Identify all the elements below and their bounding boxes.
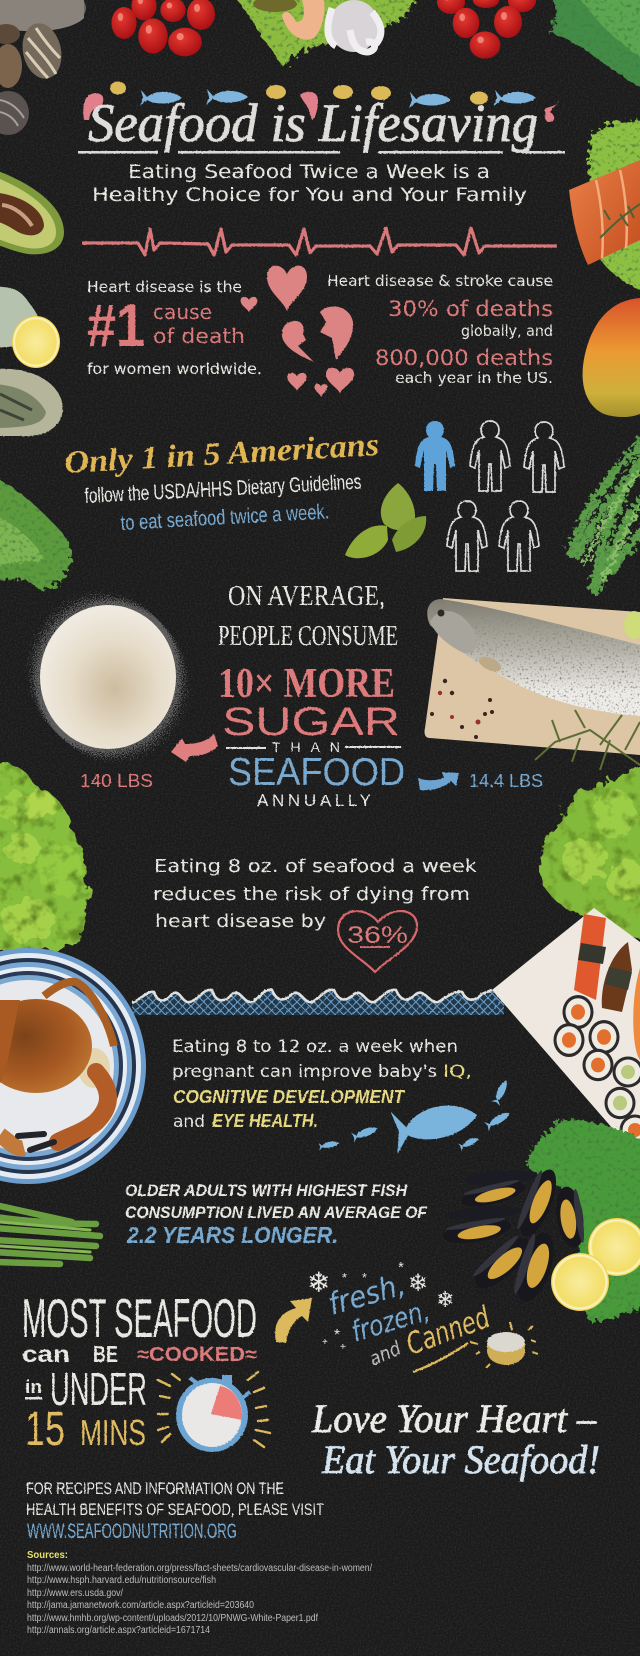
text: fresh frozen and canned with snowflakes xyxy=(307,1259,495,1372)
stat: 1 in 5 Americans: Only 1 in 5 Americans xyxy=(63,426,380,480)
stat: heart disease and stroke: 800,000 deaths xyxy=(375,346,553,370)
stat: 10x more sugar than seafood: SUGAR xyxy=(222,700,400,744)
food: mussels and lemons xyxy=(442,1165,640,1311)
food: kale right xyxy=(526,1120,640,1322)
arrow and label: sugar pounds: 140 LBS xyxy=(80,771,153,791)
stat: cook under 15 minutes: 15 xyxy=(25,1403,65,1456)
stat: 1 in 5 Americans: follow the USDA/HHS Dietary Guidelines xyxy=(84,471,362,508)
text: fresh frozen and canned with snowflakes: + xyxy=(340,1342,346,1353)
sources: Sources: xyxy=(27,1549,68,1561)
stat: pregnant baby's IQ: COGNITIVE DEVELOPMENT xyxy=(173,1087,406,1107)
stat: heart disease and stroke: each year in the US. xyxy=(395,369,553,387)
arrow and label: seafood pounds xyxy=(418,771,543,791)
sources xyxy=(27,1549,372,1636)
icon: school of fish xyxy=(318,1078,512,1154)
icon: tin can xyxy=(470,1322,538,1368)
food: trout on cutting board xyxy=(425,598,640,770)
stat: 8 oz of seafood reduces risk: Eating 8 oz. of seafood a week xyxy=(154,856,478,877)
stat: pregnant baby's IQ: pregnant can improve baby's xyxy=(172,1062,437,1082)
stat: pregnant baby's IQ: Eating 8 to 12 oz. a week when xyxy=(172,1037,458,1057)
text: fresh frozen and canned with snowflakes: ❄ xyxy=(307,1267,330,1298)
sources: http://www.hsph.harvard.edu/nutritionsource/fish xyxy=(27,1575,216,1586)
sources: http://www.hmhb.org/wp-content/uploads/2012/10/PNWG-White-Paper1.pdf xyxy=(27,1613,318,1624)
text: fresh frozen and canned with snowflakes: Canned xyxy=(402,1300,495,1363)
stat: 10x more sugar than seafood: SEAFOOD xyxy=(228,751,405,794)
stat: cook under 15 minutes: can xyxy=(22,1341,70,1367)
icon: heart with 36 percent xyxy=(338,911,417,972)
food: lettuce left xyxy=(0,764,87,952)
stat: pregnant baby's IQ: EYE HEALTH. xyxy=(212,1111,318,1131)
call to action: WWW.SEAFOODNUTRITION.ORG xyxy=(27,1520,237,1543)
food: lettuce, shrimp and octopus xyxy=(229,0,418,68)
stat: 10x more sugar than seafood: 10× MORE xyxy=(218,661,395,707)
stat: older adults live longer: CONSUMPTION LIVED AN AVERAGE OF xyxy=(125,1203,428,1222)
stat: number one cause of death xyxy=(87,278,262,378)
food: rosemary right xyxy=(570,436,640,590)
stat: heart disease and stroke: globally, and xyxy=(461,322,553,340)
icon: stopwatch xyxy=(158,1372,270,1452)
food: avocado xyxy=(0,168,64,254)
food: herbs top right xyxy=(548,0,640,100)
stat: 1 in 5 Americans xyxy=(63,426,380,535)
food: green beans xyxy=(0,1205,100,1264)
closing tagline: Eat Your Seafood! xyxy=(321,1437,600,1482)
stat: 8 oz of seafood reduces risk: heart disease by xyxy=(155,911,326,932)
icon: five people, one highlighted xyxy=(415,421,564,571)
subtitle: Healthy Choice for You and Your Family xyxy=(92,184,527,206)
waves divider xyxy=(132,990,504,1015)
icon: heart with 36 percent: 36% xyxy=(347,922,408,949)
stat: number one cause of death: Heart disease is the xyxy=(87,278,242,296)
stat: pregnant baby's IQ xyxy=(172,1037,472,1132)
stat: heart disease and stroke: Heart disease & stroke cause xyxy=(327,272,553,290)
text: fresh frozen and canned with snowflakes: ❄ xyxy=(408,1270,428,1297)
text: fresh frozen and canned with snowflakes: * xyxy=(334,1327,340,1344)
text: fresh frozen and canned with snowflakes: fresh, xyxy=(325,1268,409,1323)
arrow and label: sugar pounds xyxy=(80,734,218,791)
stat: 10x more sugar than seafood: ON AVERAGE, xyxy=(228,581,385,612)
stat: number one cause of death: #1 xyxy=(87,292,145,359)
food: basil xyxy=(345,483,426,558)
food: clams top left xyxy=(0,0,86,135)
call to action: HEALTH BENEFITS OF SEAFOOD, PLEASE VISIT xyxy=(26,1500,324,1519)
stat: cook under 15 minutes: BE xyxy=(93,1341,118,1367)
food: lettuce right xyxy=(540,764,640,950)
stat: cook under 15 minutes: in xyxy=(25,1377,42,1397)
title decorations: shrimps, dots, fish xyxy=(83,82,560,122)
stat: cook under 15 minutes xyxy=(22,1287,257,1456)
stat: cook under 15 minutes: ≈COOKED≈ xyxy=(137,1344,257,1366)
stat: number one cause of death: cause xyxy=(153,300,212,324)
stat: number one cause of death: for women worldwide. xyxy=(87,360,262,378)
sources: http://www.world-heart-federation.org/press/fact-sheets/cardiovascular-disease-in-women/ xyxy=(27,1563,372,1574)
text: fresh frozen and canned with snowflakes: frozen, xyxy=(347,1294,434,1349)
food: sugar pile xyxy=(34,599,182,755)
food: crab on striped plate xyxy=(0,948,146,1184)
closing tagline: Love Your Heart – xyxy=(311,1396,597,1441)
stat: 8 oz of seafood reduces risk xyxy=(153,856,478,932)
closing tagline xyxy=(311,1396,600,1482)
food: dill left xyxy=(0,472,72,590)
food: sushi plate xyxy=(492,908,640,1160)
sources: http://annals.org/article.aspx?articleid=1671714 xyxy=(27,1625,210,1636)
stat: cook under 15 minutes: MOST SEAFOOD xyxy=(22,1287,257,1349)
text: fresh frozen and canned with snowflakes: ❄ xyxy=(436,1287,454,1312)
text: fresh frozen and canned with snowflakes: + xyxy=(322,1337,328,1348)
stat: 10x more sugar than seafood: PEOPLE CONSUME xyxy=(218,621,398,652)
stat: older adults live longer xyxy=(125,1181,428,1248)
stat: cook under 15 minutes: UNDER xyxy=(50,1363,147,1415)
text: fresh frozen and canned with snowflakes: * xyxy=(342,1270,347,1285)
stat: number one cause of death: of death xyxy=(153,324,245,348)
food: shell, lemon and oyster left xyxy=(0,287,63,436)
stat: 8 oz of seafood reduces risk: reduces the risk of dying from xyxy=(153,884,470,905)
icon: broken hearts xyxy=(241,266,354,397)
stat: 1 in 5 Americans: to eat seafood twice a week. xyxy=(120,500,330,535)
text: fresh frozen and canned with snowflakes: and xyxy=(366,1337,405,1371)
call to action xyxy=(26,1479,324,1543)
arrow: up to fresh frozen canned xyxy=(275,1298,312,1343)
stat: pregnant baby's IQ: and xyxy=(173,1112,205,1132)
text: fresh frozen and canned with snowflakes: * xyxy=(398,1259,404,1276)
stat: older adults live longer: OLDER ADULTS WITH HIGHEST FISH xyxy=(125,1181,408,1200)
heartbeat line xyxy=(82,228,557,255)
subtitle xyxy=(92,161,527,206)
stat: cook under 15 minutes: MINS xyxy=(80,1412,146,1453)
title: Seafood is Lifesaving xyxy=(88,93,538,153)
food: tomatoes right xyxy=(437,0,536,59)
stat: older adults live longer: 2.2 YEARS LONGER. xyxy=(126,1222,338,1248)
text: fresh frozen and canned with snowflakes: * xyxy=(362,1270,367,1285)
stat: heart disease and stroke: 30% of deaths xyxy=(388,297,553,321)
stat: 10x more sugar than seafood: ANNUALLY xyxy=(257,791,371,810)
arrow and label: seafood pounds: 14.4 LBS xyxy=(469,771,543,791)
stat: heart disease and stroke xyxy=(327,272,553,387)
food: mango xyxy=(583,298,640,417)
stat: pregnant baby's IQ: IQ, xyxy=(443,1062,472,1082)
stat: 10x more sugar than seafood: THAN xyxy=(272,739,340,755)
food: salmon on lettuce xyxy=(569,121,640,300)
subtitle: Eating Seafood Twice a Week is a xyxy=(128,161,490,183)
call to action: FOR RECIPES AND INFORMATION ON THE xyxy=(26,1479,284,1498)
sources: http://www.ers.usda.gov/ xyxy=(27,1588,123,1599)
food: tomatoes left xyxy=(111,0,215,56)
stat: 10x more sugar than seafood xyxy=(218,581,405,810)
sources: http://jama.jamanetwork.com/article.aspx?articleid=203640 xyxy=(27,1600,254,1611)
